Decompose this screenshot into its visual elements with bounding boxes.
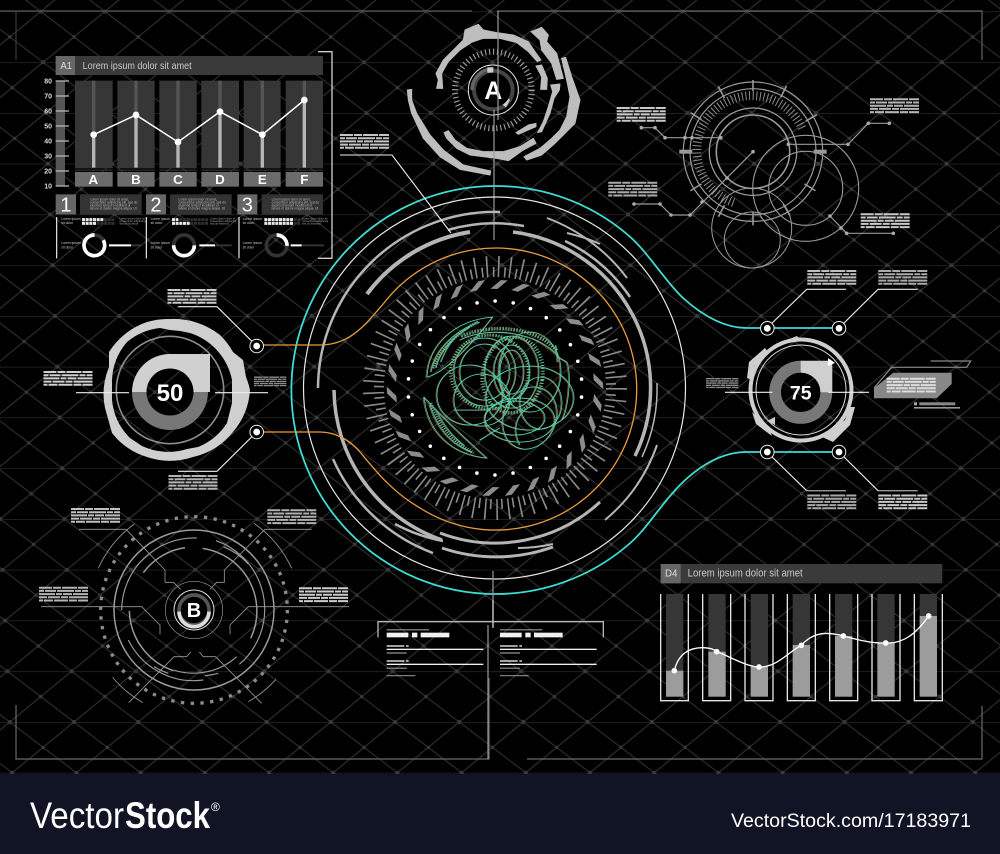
y axis: 20 <box>44 169 52 176</box>
white dot ring <box>408 301 582 475</box>
main central gauge <box>256 186 839 594</box>
mini stats and donuts: Lorem ipsum dolor sit <box>119 216 145 220</box>
y axis: 10 <box>44 184 52 191</box>
y axis: 60 <box>44 109 52 116</box>
widget: gauge 75 <box>725 336 869 442</box>
connector: central label <box>340 135 451 233</box>
mini stats and donuts: Lorem ipsum <box>243 241 262 245</box>
callouts: gauge 50 <box>44 290 286 489</box>
vertical axis line through A <box>494 11 498 240</box>
numbered cards: 2 <box>150 195 162 217</box>
chart columns: E <box>258 172 267 187</box>
mini stats and donuts: Lorem ipsum dolor sit <box>210 216 236 220</box>
widget: gauge 50 <box>76 319 268 461</box>
numbered cards: Lorem ipsum dolor sit amet, <box>90 198 129 202</box>
inner ring <box>756 345 846 435</box>
teal wire sphere <box>423 317 574 458</box>
mini stats and donuts: sit dolor <box>61 245 74 249</box>
inner arcs <box>122 538 265 681</box>
callouts: gauge 75 <box>706 271 927 508</box>
dark bars <box>666 594 937 697</box>
right text block <box>500 629 597 676</box>
value bars <box>666 616 937 697</box>
chart columns: A <box>89 172 99 187</box>
mini stats and donuts: Lorem ipsum <box>61 241 81 245</box>
mini stats and donuts: consectetur adipiscing <box>119 219 146 223</box>
numbered cards: 3 <box>242 195 253 217</box>
chart header <box>56 56 323 75</box>
core: A <box>484 78 502 105</box>
numbered cards: eiusmod tempor incididunt ut <box>90 204 130 208</box>
chart columns: D <box>215 172 225 187</box>
widget: overlapping circles <box>608 80 919 268</box>
D4 header <box>661 564 942 583</box>
D4 header: Lorem ipsum dolor sit amet <box>688 567 803 579</box>
pointer lines <box>41 523 349 703</box>
crosshair <box>76 392 268 394</box>
bracket <box>318 52 332 258</box>
mini stats and donuts: Lorem ipsum <box>151 241 170 245</box>
chart columns <box>75 81 323 187</box>
trend curve <box>674 616 929 671</box>
inner ring <box>116 336 224 444</box>
mini stats and donuts: sit dolor <box>151 245 163 249</box>
chart columns: F <box>300 172 308 187</box>
mini stats and donuts: Lorem ipsum <box>151 217 170 221</box>
numbered cards: 1 <box>60 195 72 217</box>
perpendicular bars <box>679 80 827 225</box>
footer logo <box>30 795 220 836</box>
mini stats and donuts: Lorem ipsum dolor sit <box>302 216 328 220</box>
numbered cards: consectetur adipiscing elit, sed do <box>272 201 319 205</box>
axis stub <box>491 600 495 628</box>
main ring <box>114 530 274 690</box>
small ring <box>165 581 223 639</box>
mini stats and donuts: consectetur adipiscing <box>302 219 329 223</box>
curve points <box>671 613 931 673</box>
footer logo: Stock <box>125 795 210 836</box>
footer url: VectorStock.com/17183971 <box>731 810 971 832</box>
y axis <box>44 79 69 191</box>
core <box>468 65 518 115</box>
panel: bottom text blocks <box>378 600 603 676</box>
donut value <box>132 354 210 392</box>
footer band <box>0 774 1000 854</box>
inner rings <box>709 108 797 195</box>
chart columns: C <box>173 172 183 187</box>
outer ring with bumps <box>747 336 855 442</box>
footer logo: ® <box>211 800 220 814</box>
overlapping circles <box>753 135 859 241</box>
mini stats and donuts: Lorem ipsum <box>243 217 262 221</box>
bracket <box>378 622 603 637</box>
crosshair <box>725 391 869 393</box>
orange connector ring <box>256 248 637 530</box>
widget: A emblem <box>407 24 580 175</box>
numbered cards: Lorem ipsum dolor sit amet, <box>178 198 217 202</box>
mini stats and donuts: sit dolor <box>243 245 255 249</box>
radar labels <box>39 509 348 601</box>
pointer lines <box>634 123 893 233</box>
y axis: 50 <box>44 124 52 131</box>
grey arcs <box>318 212 657 557</box>
white ring <box>304 197 686 579</box>
y axis: 30 <box>44 154 52 161</box>
bottom axis line <box>488 571 493 759</box>
circle labels <box>608 99 919 227</box>
chart header: Lorem ipsum dolor sit amet <box>83 61 192 72</box>
B core <box>174 590 214 630</box>
parallelogram ring <box>387 280 603 496</box>
numbered cards: Lorem ipsum dolor sit amet, <box>272 198 311 202</box>
numbered cards: eiusmod tempor incididunt ut <box>272 204 312 208</box>
donut value <box>775 367 826 418</box>
data line <box>90 97 308 145</box>
y axis: 70 <box>44 94 52 101</box>
jagged outer ring <box>104 319 250 461</box>
chart columns: B <box>131 172 141 187</box>
mini stats and donuts: sed do eiusmod <box>119 222 139 226</box>
panel: D4 bar chart <box>661 564 942 701</box>
value 75: 75 <box>790 382 812 404</box>
radial tick ring <box>374 266 616 510</box>
mini stats and donuts <box>57 216 329 259</box>
y axis: 40 <box>44 139 52 146</box>
mini stats and donuts: consectetur adipiscing <box>210 219 237 223</box>
panel: A1 line chart <box>44 52 332 259</box>
chart header: A1 <box>60 61 72 72</box>
cyan connector ring <box>291 186 839 594</box>
B core: B <box>187 600 201 622</box>
numbered cards: labore et dolore magna aliqua. Ut <box>178 207 225 211</box>
left text block <box>387 629 483 676</box>
y axis: 80 <box>44 79 52 86</box>
D4 header: D4 <box>665 569 678 580</box>
pointer nodes <box>632 122 895 235</box>
numbered cards <box>56 194 323 217</box>
3D box label <box>874 361 971 409</box>
widget: B radar <box>39 509 349 703</box>
numbered cards: consectetur adipiscing elit, sed do <box>90 201 138 205</box>
numbered cards: labore et dolore magna aliqua. Ut <box>272 207 318 211</box>
mini stats and donuts: Lorem ipsum <box>61 217 81 221</box>
tick ring <box>455 52 532 128</box>
jagged ring fragments <box>407 24 580 175</box>
mini stats and donuts: sit dolor <box>243 221 255 225</box>
mini stats and donuts: sit dolor <box>61 221 74 225</box>
mini stats and donuts: sit dolor <box>151 221 163 225</box>
tick arc <box>697 96 802 203</box>
mini stats and donuts: sed do eiusmod <box>210 222 229 226</box>
dotted ring <box>101 517 287 703</box>
value 50: 50 <box>157 380 183 407</box>
numbered cards: labore et dolore magna aliqua. Ut <box>90 207 137 211</box>
U brackets <box>661 594 942 701</box>
numbered cards: consectetur adipiscing elit, sed do <box>178 201 226 205</box>
outer rings <box>683 82 823 221</box>
mini stats and donuts: sed do eiusmod <box>302 222 321 226</box>
footer logo: Vector <box>30 795 124 836</box>
numbered cards: eiusmod tempor incididunt ut <box>178 204 219 208</box>
